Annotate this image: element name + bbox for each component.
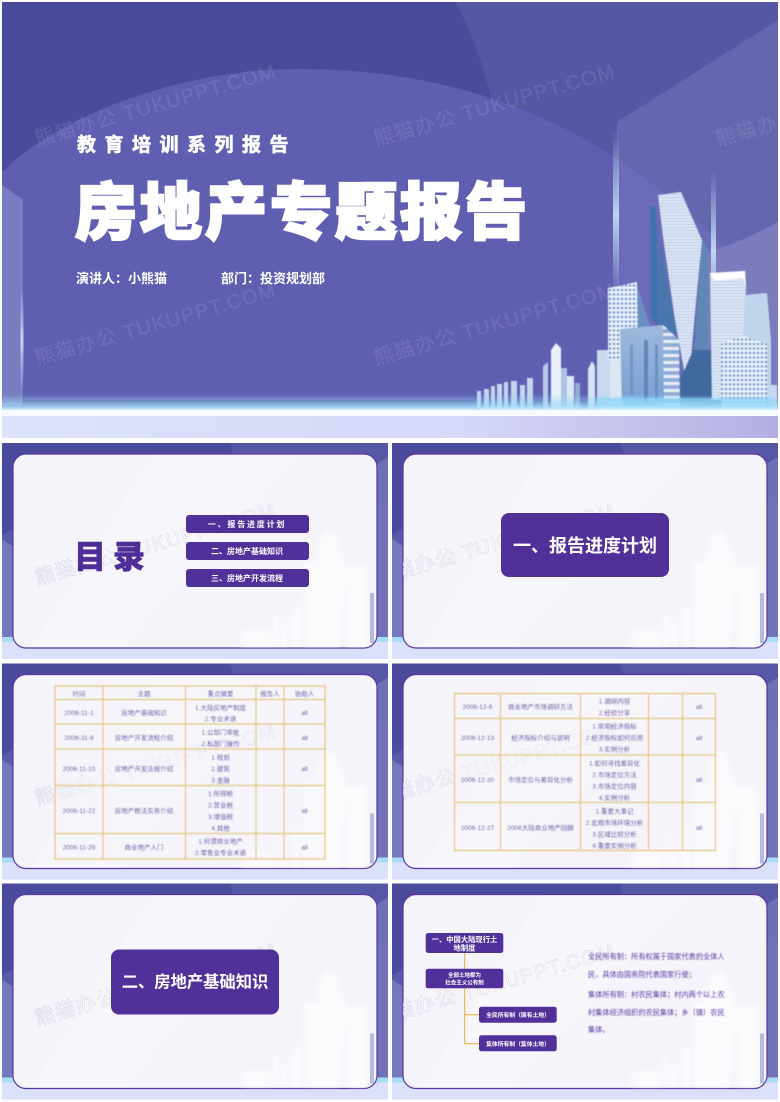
table: schedule December: 3.区域比较分析: [592, 830, 637, 838]
watermarks: 熊猫办公 TUKUPPT.COM: [32, 279, 279, 370]
department: 部门：投资规划部: [221, 271, 325, 286]
section banner: 二、房地产基础知识: [122, 972, 268, 992]
table: schedule November: 商业地产入门: [124, 842, 164, 852]
table: schedule November: 1.大陆房地产制度: [195, 703, 246, 712]
table: schedule December: 经济指标介绍与说明: [511, 733, 570, 742]
table: schedule December: 3.市场定位内容: [592, 782, 637, 790]
watermark: 熊猫办公 TUKUPPT.COM: [371, 939, 618, 1030]
table: schedule December: all: [696, 777, 703, 784]
table: schedule November: 1.规划: [211, 752, 230, 762]
watermark: 熊猫办公 TUKUPPT.COM: [32, 719, 279, 810]
table: schedule November: all: [301, 844, 308, 852]
table: schedule November: 房地产基础知识: [121, 708, 167, 717]
text block: ownership explanation: 民，具体由国务院代表国家行使；: [588, 970, 696, 979]
table: schedule December: 1.重要大事记: [596, 806, 634, 816]
node: land system title: [426, 933, 503, 953]
node: state ownership: 全民所有制（国有土地）: [486, 1011, 550, 1019]
table: schedule November: 2006-11-22: [63, 808, 96, 815]
table: schedule December: 2006-12-27: [461, 825, 495, 832]
hero background: [2, 2, 778, 438]
table: schedule December: 2.宏观市场环境分析: [586, 818, 644, 827]
table: schedule November: 1.何谓商业地产: [198, 836, 243, 846]
table: schedule December: 4.实例分析: [599, 793, 631, 802]
node: collective ownership: 集体所有制（集体土地）: [486, 1040, 550, 1048]
table: schedule December: 2006-12-13: [461, 735, 495, 742]
text block: ownership explanation: 集体所有制：村农民集体；村内两个以上农: [588, 990, 725, 999]
slide: schedule table part 2: [371, 664, 778, 880]
text block: ownership explanation: 集体。: [588, 1025, 610, 1034]
table: schedule November: 4.其他: [211, 824, 230, 832]
table: schedule November: 2006-11-8: [64, 735, 94, 742]
table: schedule November: [55, 686, 325, 859]
text block: ownership explanation: 全民所有制：所有权属于国家代表的全体人: [588, 952, 725, 961]
contents item 2: 二、房地产基础知识: [211, 546, 283, 556]
table: schedule November: all: [301, 808, 308, 815]
section banner: [501, 513, 669, 577]
main title: 房地产专题报告: [75, 179, 527, 248]
watermark: 熊猫办公 TUKUPPT.COM: [32, 499, 279, 590]
table: schedule December: all: [696, 825, 703, 832]
table: schedule December: 2.经济指标如何应用: [586, 733, 643, 742]
contents item 3: [186, 569, 309, 587]
table: schedule November: 2.营业税: [208, 800, 233, 810]
table: schedule November: 主题: [138, 689, 151, 698]
table: schedule November: 房地产开发流程介绍: [115, 733, 174, 742]
contents item 1: [186, 515, 309, 533]
table: schedule November: 时间: [72, 689, 86, 698]
node: public ownership: [426, 969, 503, 988]
floor glow: [2, 394, 778, 438]
table: schedule November: 2.零售业专业术语: [195, 848, 246, 857]
slide: section two: [2, 884, 388, 1100]
table: schedule December: 3.实例分析: [599, 744, 631, 754]
table: schedule December: 4.重要实例分析: [592, 841, 637, 850]
table: schedule November: 2006-11-29: [63, 844, 96, 852]
table: schedule November: 房地产税法实务介绍: [115, 806, 174, 815]
connector lines: [465, 952, 479, 1044]
slide: contents: [2, 443, 388, 659]
slide: land system: [371, 884, 778, 1100]
table: schedule December: 商业地产市场调研方法: [508, 702, 574, 711]
table: schedule December: 2006大陆商业地产回顾: [507, 823, 574, 832]
table: schedule November: 2.私部门操作: [202, 739, 240, 748]
flow chart: land system: [426, 933, 557, 1051]
section banner: 一、报告进度计划: [513, 536, 657, 556]
table: schedule November: 2.专业术语: [205, 714, 237, 723]
table: schedule November: 3.金融: [211, 776, 230, 784]
table: schedule December: 2006-12-6: [463, 704, 493, 711]
table: schedule December: 1.调研内容: [599, 696, 631, 706]
slide: section one: [371, 443, 778, 659]
table: schedule November: 报告人: [260, 689, 280, 698]
table: schedule November: 协助人: [295, 689, 315, 698]
watermarks: 熊猫办公 TUKUPPT.COM: [371, 279, 618, 370]
node: public ownership: 全部土地都为: [448, 971, 481, 979]
table: schedule November: all: [301, 710, 308, 717]
watermark: 熊猫办公 TUKUPPT.COM: [32, 939, 279, 1030]
watermarks: 熊猫办公 TUKUPPT.COM: [371, 60, 618, 151]
contents item 2: [186, 542, 309, 560]
subtitle: 教育培训系列报告: [77, 133, 297, 156]
node: public ownership: 社会主义公有制: [445, 978, 484, 986]
table: schedule December: all: [696, 735, 703, 742]
table: schedule November: 房地产开发法规介绍: [115, 764, 174, 773]
table: schedule November: 3.增值税: [208, 812, 233, 821]
table: schedule December: 2006-12-20: [461, 777, 495, 784]
table: schedule November: 1.公部门审批: [202, 728, 240, 736]
slide: schedule table part 1: [2, 664, 388, 880]
node: land system title: 地制度: [454, 944, 476, 952]
node: land system title: 一、中国大陆现行土: [432, 935, 497, 944]
table: schedule December: 1.常用经济指标: [592, 722, 637, 730]
table: schedule November: 2006-11-1: [64, 710, 94, 717]
watermarks: 熊猫办公 TUKUPPT.COM: [32, 60, 279, 151]
contents item 3: 三、房地产开发流程: [211, 573, 283, 583]
watermarks: [32, 60, 780, 370]
section banner: [111, 950, 279, 1014]
illustration: city skyline: [477, 192, 777, 410]
heading: 目录: [74, 539, 152, 575]
table: schedule December: 市场定位与差异化分析: [508, 775, 574, 784]
table: schedule December: 2.经验分享: [599, 708, 631, 717]
hero slide: cover: [2, 2, 780, 438]
table: schedule November: 2.建筑: [211, 764, 230, 773]
watermark: 熊猫办公 TUKUPPT.COM: [371, 499, 618, 590]
table: schedule December: all: [696, 704, 703, 711]
contents item 1: 一、报告进度计划: [208, 519, 286, 529]
table: schedule December: [454, 694, 716, 850]
table: schedule December: 2.市场定位方法: [592, 770, 637, 779]
table: schedule November: all: [301, 766, 308, 773]
watermark: 熊猫办公 TUKUPPT.COM: [371, 719, 618, 810]
presenter: 演讲人：小熊猫: [76, 271, 167, 286]
table: schedule November: 1.所得税: [208, 789, 233, 798]
table: schedule December: 1.如何寻找差异化: [589, 758, 640, 768]
text block: ownership explanation: 村集体经济组织的农民集体；乡（镇）农民: [588, 1008, 725, 1017]
table: schedule November: 2006-11-15: [63, 766, 96, 773]
text block: ownership explanation: [588, 952, 725, 1034]
table: schedule November: 重点摘要: [208, 689, 234, 698]
table: schedule November: all: [301, 735, 308, 742]
